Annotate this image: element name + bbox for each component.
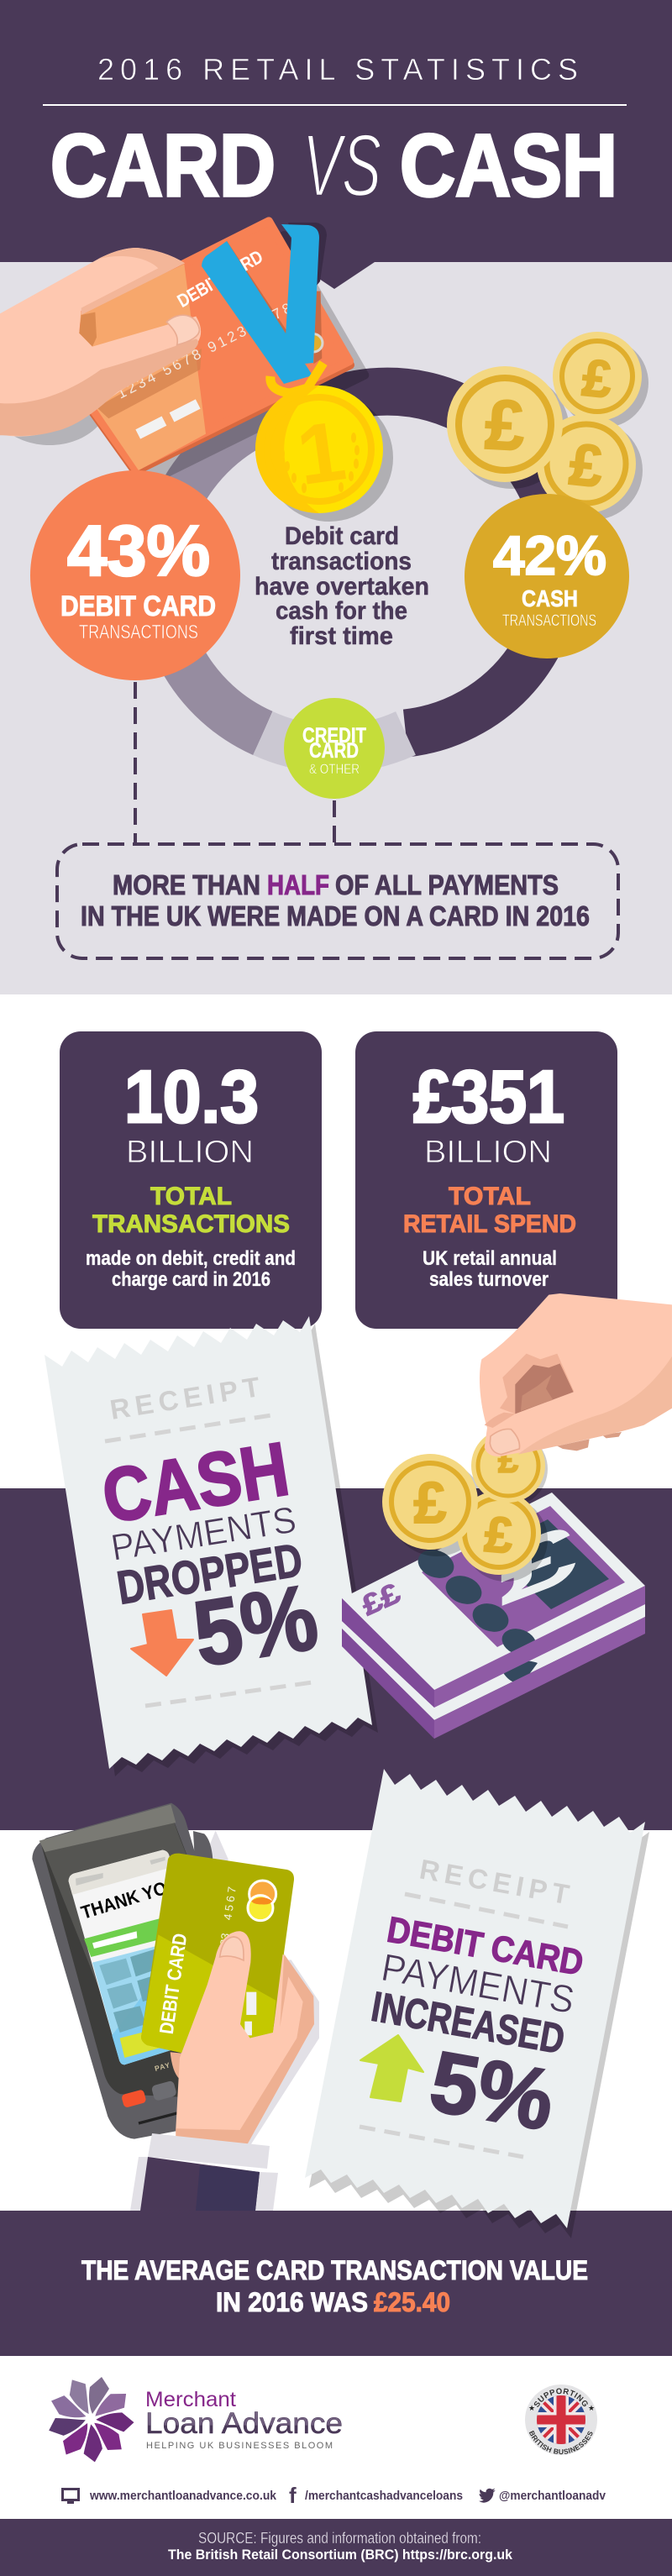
- text: average transaction value: THE AVERAGE CARD TRANSACTION VALUE: [81, 2255, 588, 2285]
- stat circle: 43% debit card: TRANSACTIONS: [79, 621, 198, 643]
- title: card vs cash: VS: [302, 117, 381, 215]
- icon: payment terminal: PAY: [154, 2060, 171, 2073]
- panel: average transaction band: [0, 2211, 672, 2356]
- icon: coins above banknotes: [382, 1429, 548, 1582]
- icon: debit card in hand at terminal: DEBIT CARD: [155, 1932, 191, 2035]
- contact links with icons: [61, 2483, 606, 2508]
- callout: more than half of payments: IN THE UK WERE MADE ON A CARD IN 2016: [81, 900, 590, 931]
- icon: stack of banknotes: £: [501, 1505, 576, 1623]
- stat circle: 43% debit card: [30, 470, 240, 680]
- icon: debit card in hand at terminal: 0123: [216, 1933, 232, 1959]
- panel: source footer: The British Retail Consortium (BRC) https://brc.org.uk: [168, 2547, 513, 2563]
- panel: total transactions: BILLION: [126, 1135, 254, 1170]
- badge: supporting British businesses: BRITISH BUSINESSES: [529, 2431, 593, 2454]
- icon: stack of banknotes: ££: [357, 1577, 405, 1622]
- icon: debit card in hand at terminal: 4567: [221, 1886, 239, 1921]
- stat circle: 42% cash: [465, 494, 629, 658]
- panel: intro background: [0, 262, 672, 994]
- badge: supporting British businesses: ★: [528, 2404, 535, 2412]
- panel: receipt debit card payments increased: RECEIPT: [417, 1853, 571, 1910]
- icon: coins above banknotes: £: [414, 1470, 447, 1535]
- panel: total transactions: TRANSACTIONS: [92, 1210, 290, 1238]
- icon: hand dropping coin: [480, 1293, 672, 1456]
- badge: supporting British businesses: [525, 2385, 597, 2455]
- panel: total transactions: charge card in 2016: [112, 1268, 270, 1291]
- contact links with icons: @merchantloanadv: [499, 2489, 606, 2503]
- text: debit overtakes cash: first time: [290, 622, 393, 650]
- icon: stack of banknotes: [342, 1493, 645, 1739]
- icon: debit card in hand at terminal: [141, 1854, 319, 2152]
- icon: debit card in hand: 1234 5678 9123 5678: [114, 299, 294, 402]
- icon: gold pound coins: £: [566, 431, 606, 500]
- panel: receipt cash payments dropped: PAYMENTS: [108, 1499, 299, 1569]
- panel: total retail spend: TOTAL: [449, 1183, 531, 1210]
- panel: receipt cash payments dropped: RECEIPT: [108, 1371, 262, 1425]
- panel: receipt cash payments dropped: [45, 1316, 378, 1776]
- text: average transaction value: IN 2016 WAS: [216, 2287, 368, 2317]
- stat circle: credit card and other: CARD: [309, 739, 359, 763]
- panel: total transactions: [60, 1031, 322, 1329]
- stat circle: 43% debit card: 43%: [67, 512, 210, 591]
- logo: merchant loan advance: [45, 2375, 343, 2465]
- panel: source footer: SOURCE: Figures and information obtained from:: [198, 2530, 481, 2547]
- panel: receipt cash payments dropped: CASH: [97, 1427, 294, 1540]
- icon: gold pound coins: £: [580, 349, 614, 410]
- icon: medal with ribbon: [202, 223, 393, 522]
- stat circle: 42% cash: TRANSACTIONS: [502, 612, 596, 630]
- text: debit overtakes cash: cash for the: [276, 597, 407, 625]
- text: average transaction value: [81, 2255, 588, 2317]
- stat circle: 42% cash: 42%: [493, 524, 606, 586]
- heading: 2016 retail statistics: 2016 RETAIL STATISTICS: [97, 52, 578, 87]
- icon: monitor: [61, 2488, 80, 2504]
- callout: more than half of payments: MORE THAN: [113, 869, 260, 900]
- stat circle: 42% cash: CASH: [522, 585, 578, 611]
- panel: total retail spend: sales turnover: [429, 1268, 549, 1291]
- panel: total transactions: 10.3: [124, 1055, 259, 1138]
- stat circle: 43% debit card: DEBIT CARD: [60, 590, 216, 622]
- chart: payment share ring: [160, 391, 559, 749]
- panel: total retail spend: BILLION: [424, 1135, 552, 1170]
- icon: twitter bird: [479, 2489, 496, 2503]
- panel: total transactions: TOTAL: [150, 1183, 232, 1210]
- stat circle: credit card and other: & OTHER: [309, 761, 360, 777]
- text: average transaction value: £25.40: [374, 2287, 450, 2317]
- icon: debit card in hand: DEBIT CARD: [174, 246, 266, 312]
- panel: receipt cash payments dropped: 5%: [187, 1565, 324, 1687]
- title: card vs cash: CASH: [400, 117, 617, 215]
- panel: receipt debit card payments increased: INCREASED: [368, 1983, 568, 2063]
- panel: receipt debit card payments increased: 5%: [423, 2033, 561, 2148]
- icon: payment terminal: THANK YOU: [78, 1874, 181, 1923]
- title: card vs cash: CARD: [50, 117, 276, 215]
- icon: debit card in hand: [0, 221, 365, 481]
- icon: orange down arrow: [131, 1610, 193, 1676]
- panel: receipt debit card payments increased: PAYMENTS: [378, 1945, 578, 2022]
- icon: medal with ribbon: 1: [291, 403, 351, 503]
- panel: receipt debit card payments increased: DEBIT CARD: [384, 1910, 586, 1984]
- logo: merchant loan advance: HELPING UK BUSINESSES BLOOM: [146, 2441, 333, 2451]
- stat circle: credit card and other: [284, 698, 385, 799]
- icon: gold pound coins: [447, 332, 648, 520]
- panel: receipt debit card payments increased: [305, 1769, 649, 2238]
- panel: total retail spend: UK retail annual: [423, 1247, 557, 1270]
- panel: purple band for cash drop: [0, 1488, 672, 1830]
- icon: green up arrow: [360, 2035, 423, 2101]
- text: debit overtakes cash: Debit card: [285, 522, 399, 550]
- panel: total retail spend: RETAIL SPEND: [403, 1210, 576, 1238]
- callout: more than half of payments: OF ALL PAYMENTS: [335, 869, 559, 900]
- contact links with icons: /merchantcashadvanceloans: [305, 2489, 463, 2503]
- icon: coins above banknotes: £: [482, 1506, 515, 1564]
- logo: merchant loan advance: Merchant: [145, 2388, 236, 2411]
- icon: shirt cuff and sleeve: [130, 2133, 278, 2211]
- callout: more than half of payments: HALF: [267, 869, 329, 900]
- badge: supporting British businesses: SUPPORTING: [534, 2389, 588, 2407]
- text: debit overtakes cash: transactions: [271, 548, 412, 575]
- contact links with icons: www.merchantloanadvance.co.uk: [89, 2489, 277, 2503]
- panel: header: [0, 0, 672, 289]
- badge: supporting British businesses: ★: [588, 2404, 595, 2412]
- stat circle: credit card and other: CREDIT: [302, 724, 366, 748]
- panel: total retail spend: £351: [413, 1055, 564, 1138]
- title: card vs cash: [50, 117, 617, 215]
- panel: source footer: [0, 2519, 672, 2576]
- icon: gold pound coins: £: [483, 385, 527, 465]
- text: debit overtakes cash: [255, 522, 429, 650]
- panel: receipt cash payments dropped: DROPPED: [113, 1533, 306, 1614]
- contact links with icons: f: [289, 2483, 297, 2508]
- logo: merchant loan advance: Loan Advance: [145, 2407, 343, 2440]
- icon: payment terminal: [32, 1803, 228, 2139]
- callout: more than half of payments: [57, 844, 618, 958]
- panel: total retail spend: [355, 1031, 617, 1329]
- panel: total transactions: made on debit, credit and: [86, 1247, 296, 1270]
- dashed connector lines: [135, 682, 334, 843]
- text: debit overtakes cash: have overtaken: [255, 573, 429, 601]
- icon: coins above banknotes: £: [498, 1440, 519, 1481]
